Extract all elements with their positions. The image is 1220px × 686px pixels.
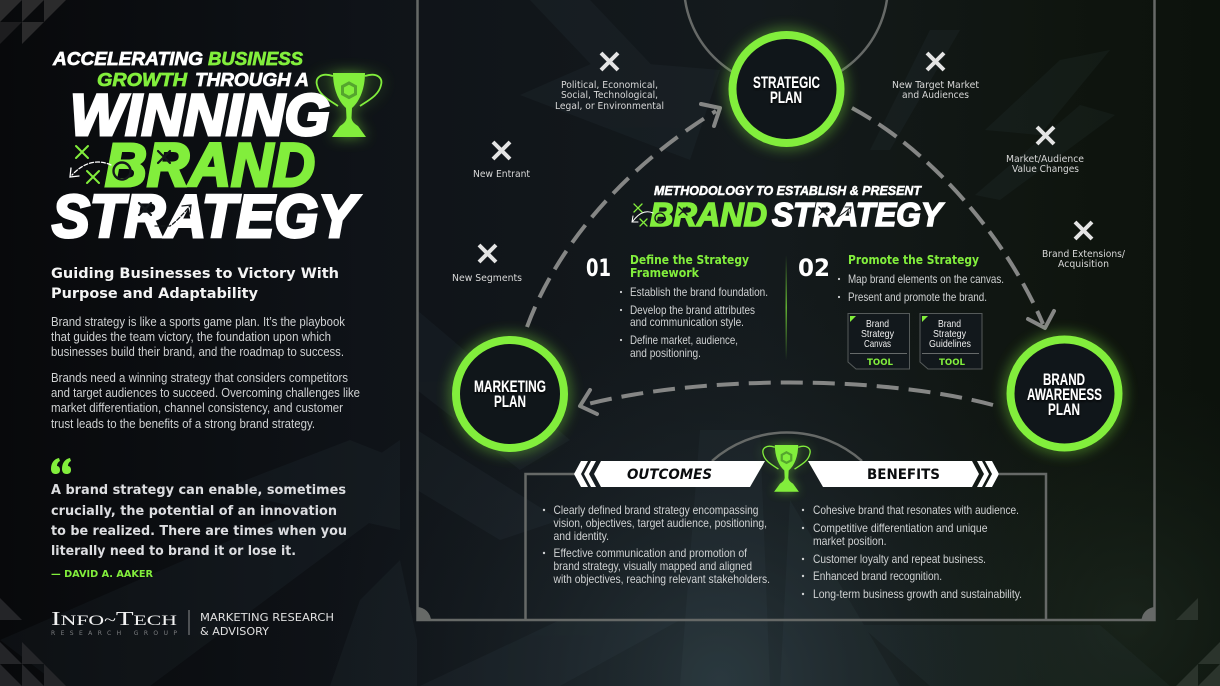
tool card: brand strategy guidelines: Strategy <box>933 328 967 340</box>
methodology heading: BRAND <box>650 196 767 233</box>
icon: center trophy <box>763 445 810 492</box>
marker: brand extensions: Brand Extensions/ <box>1042 249 1126 260</box>
marker: market/audience value changes: Value Changes <box>1012 164 1079 175</box>
step 01: define the strategy framework: Define the Strategy <box>630 253 749 267</box>
node: brand awareness plan: AWARENESS <box>1027 386 1102 404</box>
left column: second paragraph: Brands need a winning strategy that considers competitors <box>51 370 348 385</box>
tool card: brand strategy canvas: Canvas <box>864 338 891 350</box>
step 01: define the strategy framework: and communication style. <box>630 315 744 329</box>
left column: second paragraph: and target audiences to succeed. Overcoming challenges like <box>51 385 360 400</box>
logo <box>51 608 334 638</box>
left column: intro paragraph: Brand strategy is like a sports game plan. It’s the playbook <box>51 314 345 329</box>
logo: MARKETING RESEARCH <box>200 612 334 624</box>
outcomes list: Effective communication and promotion of <box>554 546 748 560</box>
marker: political, economical <box>555 53 664 112</box>
step 01: define the strategy framework: Framework <box>630 266 700 280</box>
banner: outcomes <box>574 461 765 487</box>
node: strategic plan: PLAN <box>770 89 802 107</box>
tool card: brand strategy canvas: Brand <box>866 318 889 330</box>
logo: INFO~ T ECH <box>51 608 177 630</box>
title line 1: ACCELERATING <box>52 48 203 69</box>
step 01: define the strategy framework <box>586 253 768 360</box>
benefits list: Customer loyalty and repeat business. <box>813 552 986 566</box>
left column: intro paragraph: that guides the team victory, the foundation upon which <box>51 329 331 344</box>
benefits list: Long-term business growth and sustainability. <box>813 587 1022 601</box>
outcomes list: vision, objectives, target audience, positioning, <box>554 516 767 530</box>
marker: market/audience value changes <box>1006 127 1084 175</box>
banner: benefits: BENEFITS <box>867 467 940 483</box>
quote attribution: — DAVID A. AAKER <box>51 569 154 580</box>
tool card: brand strategy guidelines <box>920 314 982 369</box>
left column: intro paragraph: businesses build their brand, and the roadmap to success. <box>51 344 344 359</box>
banner: outcomes: OUTCOMES <box>627 467 712 483</box>
tool card: brand strategy guidelines: Brand <box>938 318 961 330</box>
outcomes list: brand strategy, visually mapped and aligned <box>554 559 752 573</box>
title line 2: GROWTH <box>97 69 188 90</box>
node: marketing plan <box>455 339 565 449</box>
title word: brand: BRAND <box>105 131 315 199</box>
left column: subheading <box>51 266 339 302</box>
title line 1: BUSINESS <box>208 48 304 69</box>
marker: new target market: New Target Market <box>892 80 979 91</box>
outcomes list: with objectives, reaching relevant stakeholders. <box>553 572 770 586</box>
quote: A brand strategy can enable, sometimes <box>51 482 346 498</box>
arrow: strategic plan to brand awareness plan <box>852 108 1054 328</box>
marker: brand extensions <box>1042 222 1126 270</box>
banner: benefits <box>808 461 999 487</box>
step 02: promote the strategy <box>798 253 1004 304</box>
benefits list: Competitive differentiation and unique <box>813 521 988 535</box>
step 01: define the strategy framework: Develop the brand attributes <box>630 303 755 317</box>
methodology heading <box>632 184 945 233</box>
playbook marks <box>70 146 191 226</box>
step 01: define the strategy framework: Establish the brand foundation. <box>630 285 768 299</box>
step 02: promote the strategy: Present and promote the brand. <box>848 290 987 304</box>
logo: RESEARCH GROUP <box>51 630 177 637</box>
marker: political, economical: Social, Technological, <box>561 90 658 101</box>
marker: new target market: and Audiences <box>902 90 969 101</box>
quote: crucially, the potential of an innovation <box>51 503 337 519</box>
left column: second paragraph <box>51 370 360 431</box>
tool card: brand strategy canvas: TOOL <box>867 358 893 368</box>
node: brand awareness plan: PLAN <box>1048 401 1080 419</box>
step 01: define the strategy framework: and positioning. <box>630 346 701 360</box>
left column: intro paragraph <box>51 314 345 359</box>
node: marketing plan: PLAN <box>494 393 526 411</box>
arrow: brand awareness plan to marketing plan <box>580 382 993 414</box>
node: brand awareness plan <box>1010 338 1120 448</box>
node: strategic plan <box>732 34 842 144</box>
benefits list: Cohesive brand that resonates with audience. <box>813 503 1019 517</box>
icon: quotation mark <box>51 458 71 474</box>
marker: new entrant <box>473 142 530 180</box>
left column: second paragraph: trust leads to the benefits of a strong brand strategy. <box>51 416 315 431</box>
methodology heading: METHODOLOGY TO ESTABLISH & PRESENT <box>654 184 922 198</box>
left column: second paragraph: market differentiation, channel consistency, and customer <box>51 400 344 415</box>
outcomes list: and identity. <box>554 529 609 543</box>
step 02: promote the strategy: 02 <box>798 254 830 282</box>
title line 2 <box>97 69 309 90</box>
arrow: marketing plan to strategic plan <box>527 104 720 327</box>
left column: title block <box>52 48 381 250</box>
step 01: define the strategy framework: 01 <box>586 254 611 282</box>
benefits list: Enhanced brand recognition. <box>813 569 942 583</box>
tool card: brand strategy guidelines: Guidelines <box>929 338 971 350</box>
benefits list <box>802 503 1022 601</box>
marker: brand extensions: Acquisition <box>1058 259 1109 270</box>
marker: political, economical: Legal, or Environmental <box>555 101 664 112</box>
quote: to be realized. There are times when you <box>51 523 347 539</box>
tool card: brand strategy guidelines: TOOL <box>939 358 965 368</box>
quote <box>51 482 347 559</box>
logo: & ADVISORY <box>200 626 270 638</box>
playing field frame <box>417 0 1156 621</box>
title word: strategy: STRATEGY <box>52 183 361 250</box>
benefits list: market position. <box>813 534 886 548</box>
marker: new segments: New Segments <box>452 273 522 284</box>
divider <box>786 255 787 360</box>
marker: political, economical: Political, Economical, <box>561 80 658 91</box>
marker: market/audience value changes: Market/Audience <box>1006 154 1084 165</box>
marker: new target market <box>892 53 979 101</box>
tool card: brand strategy canvas <box>848 314 910 369</box>
node: brand awareness plan: BRAND <box>1043 371 1085 389</box>
title word: winning: WINNING <box>70 83 330 148</box>
title line 1 <box>52 48 304 69</box>
left column: subheading: Purpose and Adaptability <box>51 286 259 302</box>
step 02: promote the strategy: Promote the Strategy <box>848 253 979 267</box>
step 02: promote the strategy: Map brand elements on the canvas. <box>848 272 1004 286</box>
node: strategic plan: STRATEGIC <box>753 74 820 92</box>
tool card: brand strategy canvas: Strategy <box>861 328 895 340</box>
outcomes list: Clearly defined brand strategy encompassing <box>554 503 758 517</box>
methodology heading: STRATEGY <box>772 196 945 233</box>
outcomes list <box>543 503 770 586</box>
left column: subheading: Guiding Businesses to Victory With <box>51 266 339 282</box>
quote: literally need to brand it or lose it. <box>51 543 296 559</box>
marker: new segments <box>452 245 522 284</box>
node: marketing plan: MARKETING <box>474 378 546 396</box>
title line 2: THROUGH A <box>195 69 309 90</box>
icon: trophy <box>317 73 381 137</box>
marker: new entrant: New Entrant <box>473 169 530 180</box>
step 01: define the strategy framework: Define market, audience, <box>630 333 738 347</box>
